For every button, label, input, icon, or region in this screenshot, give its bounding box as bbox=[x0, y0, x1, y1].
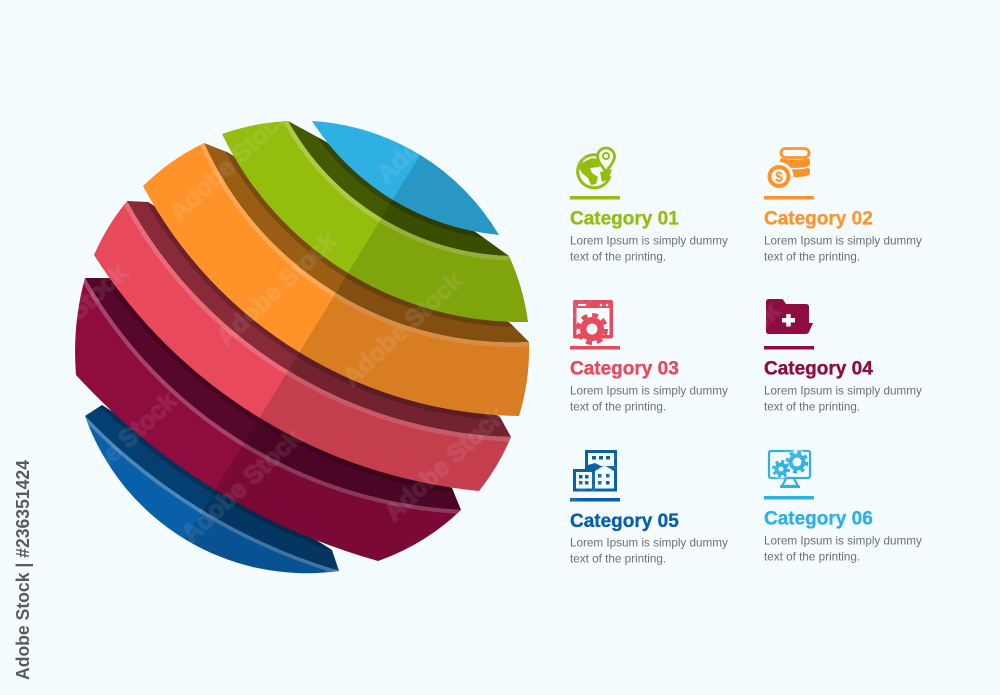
category 04 block bbox=[764, 299, 922, 414]
body text: Lorem Ipsum is simply dummy bbox=[764, 534, 922, 548]
heading: Category 04 bbox=[764, 358, 873, 380]
category 01 block bbox=[570, 148, 728, 264]
icon: globe with pin bbox=[578, 148, 614, 188]
body text: Lorem Ipsum is simply dummy bbox=[570, 536, 728, 550]
watermark pattern: Adobe Stock bbox=[219, 562, 350, 686]
watermark pattern: Adobe Stock bbox=[702, 72, 833, 196]
icon: coins bbox=[764, 148, 810, 191]
category 05 block bbox=[570, 450, 728, 566]
body text: Lorem Ipsum is simply dummy bbox=[570, 384, 728, 398]
body text: Lorem Ipsum is simply dummy bbox=[570, 234, 728, 248]
band: light blue slice bbox=[312, 121, 499, 235]
heading: Category 02 bbox=[764, 208, 873, 230]
watermark pattern: Adobe Stock bbox=[379, 402, 510, 526]
heading: Category 06 bbox=[764, 508, 873, 530]
body text: text of the printing. bbox=[764, 250, 860, 264]
icon: buildings bbox=[573, 450, 617, 492]
band: maroon slice bbox=[75, 278, 461, 561]
watermark pattern: Adobe Stock bbox=[1, 259, 132, 383]
body text: text of the printing. bbox=[764, 400, 860, 414]
watermark pattern: Adobe Stock bbox=[371, 64, 502, 188]
divider bar bbox=[570, 196, 620, 200]
category 02 block bbox=[764, 148, 922, 264]
body text: Lorem Ipsum is simply dummy bbox=[764, 234, 922, 248]
watermark pattern: Adobe Stock bbox=[544, 212, 675, 336]
category 06 block bbox=[764, 450, 922, 564]
divider bar bbox=[764, 496, 814, 500]
watermark pattern: Adobe Stock bbox=[551, 567, 682, 691]
band: orange slice bbox=[143, 143, 530, 416]
band: dark blue slice bbox=[85, 405, 339, 574]
watermark pattern: Adobe Stock bbox=[654, 297, 785, 421]
icon: folder with plus bbox=[766, 299, 813, 334]
body text: text of the printing. bbox=[570, 250, 666, 264]
vertical stock id text: Adobe Stock | #236351424 bbox=[12, 459, 33, 680]
body text: text of the printing. bbox=[570, 552, 666, 566]
icon: browser window with gear bbox=[573, 300, 613, 343]
body text: text of the printing. bbox=[570, 400, 666, 414]
divider bar bbox=[764, 346, 814, 350]
watermark pattern: Adobe Stock bbox=[211, 227, 342, 351]
watermark pattern: Adobe Stock bbox=[51, 387, 182, 511]
divider bar bbox=[764, 196, 814, 200]
watermark pattern: Adobe Stock bbox=[37, 57, 168, 181]
icon: coins: $ bbox=[775, 168, 783, 184]
body text: Lorem Ipsum is simply dummy bbox=[764, 384, 922, 398]
band: coral slice bbox=[94, 201, 511, 491]
body text: text of the printing. bbox=[764, 550, 860, 564]
divider bar bbox=[570, 346, 620, 350]
category 03 block bbox=[570, 300, 728, 414]
divider bar bbox=[570, 498, 620, 502]
watermark pattern: Adobe Stock bbox=[499, 107, 630, 231]
watermark pattern: Adobe Stock bbox=[176, 424, 307, 548]
watermark pattern: Adobe Stock bbox=[714, 407, 845, 531]
watermark pattern: Adobe Stock bbox=[841, 447, 972, 571]
heading: Category 03 bbox=[570, 358, 679, 380]
heading: Category 01 bbox=[570, 208, 679, 230]
band: green slice bbox=[222, 121, 528, 322]
watermark pattern: Adobe Stock bbox=[164, 102, 295, 226]
watermark pattern: Adobe Stock bbox=[509, 437, 640, 561]
watermark pattern: Adobe Stock bbox=[337, 267, 468, 391]
watermark pattern: Adobe Stock bbox=[831, 112, 962, 236]
icon: monitor with gears bbox=[769, 450, 810, 488]
sphere chart bbox=[75, 121, 530, 574]
heading: Category 05 bbox=[570, 511, 679, 532]
